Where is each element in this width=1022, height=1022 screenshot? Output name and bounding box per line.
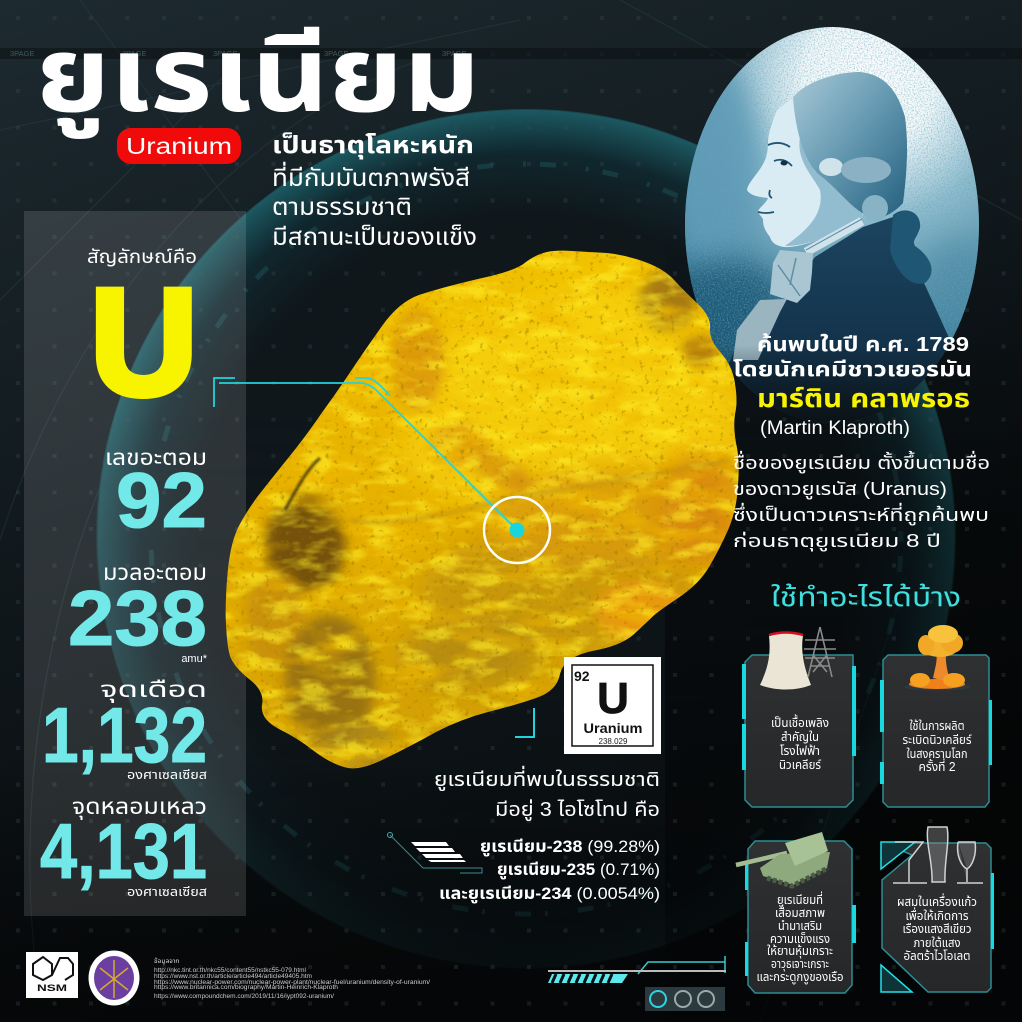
periodic table tile: 92 <box>574 668 590 684</box>
logo: NSM: NSM <box>37 983 67 993</box>
rock texture <box>226 264 739 768</box>
logo: NSM <box>26 952 78 998</box>
label: symbol: สัญลักษณ์คือ <box>87 247 197 268</box>
discovery body text: ของดาวยูเรนัส (Uranus) <box>733 479 947 501</box>
value: atomic mass: 238 <box>68 574 207 662</box>
card: uranium glass: ผสมในเครื่องแก้ว <box>897 893 977 909</box>
isotopes text: และยูเรเนียม-234 (0.0054%) <box>439 884 660 904</box>
title: ยูเรเนียม <box>36 17 480 139</box>
background: 3PAGE <box>442 49 466 58</box>
card: uranium glass: เพื่อให้เกิดการ <box>906 907 968 923</box>
intro text <box>272 132 477 251</box>
periodic table tile: U <box>597 674 629 723</box>
cravat <box>770 250 813 303</box>
label: atomic mass: มวลอะตอม <box>103 560 207 585</box>
card: depleted uranium: ยูเรเนียมที่ <box>777 891 823 907</box>
card: nuclear fuel <box>742 627 856 807</box>
card: nuclear fuel: เป็นเชื้อเพลิง <box>771 714 829 730</box>
discovery body text <box>733 450 990 553</box>
isotopes text: ยูเรเนียมที่พบในธรรมชาติ <box>434 765 660 792</box>
value: boiling point: 1,132 <box>42 691 207 779</box>
card: nuclear bomb: ครั้งที่ 2 <box>918 758 956 774</box>
element symbol U: U <box>90 257 197 426</box>
uranium rock <box>215 240 755 780</box>
references: https://www.britannica.com/biography/Martin-Heinrich-Klaproth <box>154 984 338 991</box>
background: 3PAGE <box>10 49 34 58</box>
background: 3PAGE <box>122 49 146 58</box>
isotopes text: ยูเรเนียม-238 (99.28%) <box>480 837 660 857</box>
discovery body text: ซึ่งเป็นดาวเคราะห์ที่ถูกค้นพบ <box>733 502 989 527</box>
isotopes text <box>434 765 660 904</box>
curls <box>819 158 843 176</box>
discovery body text: ก่อนธาตุยูเรเนียม 8 ปี <box>733 531 941 553</box>
facial features <box>758 143 792 213</box>
card: nuclear bomb: ระเบิดนิวเคลียร์ <box>902 733 972 747</box>
icon: tank <box>736 832 830 886</box>
card: depleted uranium: นำมาเสริม <box>778 919 822 933</box>
pointer line and target marker <box>214 378 550 563</box>
references: https://www.nuclear-power.com/nuclear-power-plant/nuclear-fuel/uranium/density-of-uranium/ <box>154 979 430 986</box>
label: melting point: จุดหลอมเหลว <box>72 794 207 820</box>
card: depleted uranium: ให้ยานหุ้มเกราะ <box>767 944 833 958</box>
periodic table tile: Uranium <box>584 720 642 736</box>
card: nuclear fuel: สำคัญใน <box>781 730 819 744</box>
discovery heading: (Martin Klaproth) <box>760 418 910 439</box>
card: uranium glass <box>881 827 994 992</box>
card: depleted uranium <box>736 832 856 993</box>
references: https://www.nst.or.th/article/article494/article49405.htm <box>154 973 312 980</box>
icon: glasses <box>893 827 983 883</box>
discovery heading: โดยนักเคมีชาวเยอรมัน <box>733 359 972 381</box>
badge: Uranium <box>117 128 241 164</box>
discovery heading <box>733 334 972 439</box>
background: 3PAGE <box>213 49 237 58</box>
card: nuclear bomb: ใช้ในการผลิต <box>910 719 964 733</box>
rock shading <box>400 270 740 520</box>
value: melting point: 4,131 <box>40 807 207 895</box>
card: nuclear fuel: นิวเคลียร์ <box>779 758 822 772</box>
intro text: มีสถานะเป็นของแข็ง <box>272 223 477 251</box>
coat <box>728 217 950 423</box>
references: http://nkc.tint.or.th/nkc55/content55/nstkc55-079.html <box>154 967 307 974</box>
HUD decoration bottom right <box>548 956 726 1011</box>
intro text: เป็นธาตุโลหะหนัก <box>272 132 474 160</box>
isotopes text: ยูเรเนียม-235 (0.71%) <box>497 860 660 880</box>
card: nuclear fuel: โรงไฟฟ้า <box>780 744 820 758</box>
unit: amu: amu* <box>181 653 208 665</box>
badge: Uranium: Uranium <box>126 133 232 159</box>
portrait: Martin Klaproth <box>685 27 979 423</box>
references <box>154 957 430 1000</box>
card: nuclear bomb <box>880 625 992 807</box>
intro text: ตามธรรมชาติ <box>272 194 412 221</box>
card: uranium glass: ภายใต้แสง <box>914 936 961 950</box>
card: depleted uranium: เสื่อมสภาพ <box>775 904 825 920</box>
periodic table tile <box>564 657 661 754</box>
side panel: element facts <box>24 211 246 916</box>
intro text: ที่มีกัมมันตภาพรังสี <box>272 161 470 192</box>
unit: celsius: องศาเซลเซียส <box>127 768 207 782</box>
label: boiling point: จุดเดือด <box>100 677 207 703</box>
mini HUD bars <box>388 832 482 873</box>
uses heading: ใช้ทำอะไรได้บ้าง <box>771 582 961 612</box>
icon: mushroom cloud <box>904 625 970 690</box>
isotopes text: มีอยู่ 3 ไอโซโทป คือ <box>495 798 660 822</box>
corner bracket <box>515 708 534 737</box>
card: nuclear bomb: ในสงครามโลก <box>906 747 968 761</box>
card: depleted uranium: และกระดูกงูของเรือ <box>756 970 844 984</box>
collar <box>806 221 862 252</box>
discovery body text: ชื่อของยูเรเนียม ตั้งขึ้นตามชื่อ <box>733 450 990 475</box>
icon: cooling tower and pylon <box>760 627 836 690</box>
discovery heading: มาร์ติน คลาพรอธ <box>757 383 970 413</box>
hair queue <box>890 210 932 284</box>
background: 3PAGE <box>324 49 348 58</box>
references: https://www.compoundchem.com/2019/11/16/iypt092-uranium/ <box>154 993 334 1000</box>
label: atomic number: เลขอะตอม <box>105 445 207 470</box>
face <box>747 98 863 247</box>
discovery heading: ค้นพบในปี ค.ศ. 1789 <box>757 334 969 356</box>
unit: celsius: องศาเซลเซียส <box>127 885 207 899</box>
value: atomic number: 92 <box>116 456 207 544</box>
hair <box>793 72 907 218</box>
card: uranium glass: อัลตร้าไวโอเลต <box>904 949 970 963</box>
logo: ministry seal <box>88 950 140 1006</box>
card: depleted uranium: ความแข็งแรง <box>770 932 830 946</box>
periodic table tile: 238.029 <box>599 737 628 746</box>
card: uranium glass: เรืองแสงสีเขียว <box>902 922 972 936</box>
card: depleted uranium: อาวุธเจาะเกราะ <box>771 957 829 971</box>
references: ข้อมูลจาก <box>154 957 179 965</box>
